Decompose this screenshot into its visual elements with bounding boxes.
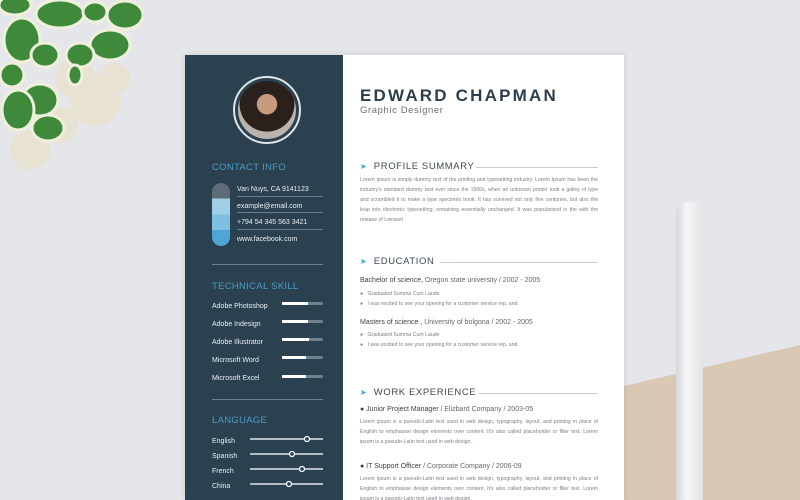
language: LANGUAGE bbox=[212, 415, 267, 426]
contact list: www.facebook.com bbox=[237, 236, 297, 242]
work experience: ● Junior Project Manager / Elizbard Company / 2003-05 bbox=[360, 406, 533, 413]
education bbox=[360, 256, 598, 348]
work experience bbox=[360, 387, 598, 500]
education: ● Graduated Summa Cum Laude bbox=[360, 291, 440, 297]
plant decoration bbox=[0, 0, 144, 170]
technical skill: TECHNICAL SKILL bbox=[212, 281, 299, 292]
contact icons pill bbox=[212, 183, 230, 246]
sidebar: French bbox=[212, 468, 234, 475]
education: ● Graduated Summa Cum Laude bbox=[360, 332, 440, 338]
subtitle: Graphic Designer bbox=[360, 105, 444, 116]
work experience: ● IT Support Officer / Corporate Company / 2006-09 bbox=[360, 463, 522, 470]
contact info heading: CONTACT INFO bbox=[212, 162, 286, 173]
sidebar: Microsoft Excel bbox=[212, 375, 259, 382]
education: ● I was excited to see your opening for a customer service rep, and. bbox=[360, 342, 519, 348]
contact list bbox=[237, 186, 323, 242]
sidebar: China bbox=[212, 483, 230, 490]
sidebar: English bbox=[212, 438, 235, 445]
skill bars bbox=[282, 302, 323, 378]
resume sheet bbox=[185, 55, 624, 500]
profile summary: Lorem Ipsum is simply dummy text of the printing and typesetting industry. Lorem Ipsum has been the industry's standard dummy text ever since the 1500s, when an unknown printer took a galley of type and scrambled it to make a type specimen book. It has survived not only five centuries, but also the leap into electronic typesetting, remaining essentially unchanged. It was popularised in the with the release of Letraset bbox=[360, 177, 598, 223]
sidebar bbox=[185, 55, 343, 500]
sidebar: Adobe Illustrator bbox=[212, 339, 263, 346]
education: ➤ EDUCATION bbox=[360, 256, 434, 267]
sidebar: Adobe Photoshop bbox=[212, 303, 268, 310]
education: Masters of science , University of bolgona / 2002 - 2005 bbox=[360, 319, 533, 326]
sidebar: Adobe Indesign bbox=[212, 321, 261, 328]
contact list: Van Nuys, CA 9141123 bbox=[237, 186, 309, 193]
language sliders bbox=[250, 436, 323, 488]
contact list: +794 54 345 563 3421 bbox=[237, 219, 307, 226]
sidebar: Microsoft Word bbox=[212, 357, 259, 364]
contact list: example@email.com bbox=[237, 202, 302, 210]
work experience: ➤ WORK EXPERIENCE bbox=[360, 387, 476, 398]
profile summary: ➤ PROFILE SUMMARY bbox=[360, 161, 474, 172]
name title: EDWARD CHAPMAN bbox=[360, 86, 558, 105]
photo bbox=[233, 76, 301, 144]
education: Bachelor of science, Oregon state university / 2002 - 2005 bbox=[360, 277, 540, 284]
decorative cylinder bbox=[676, 202, 703, 500]
sidebar: Spanish bbox=[212, 453, 237, 460]
work experience: Lorem ipsum is a pseudo-Latin text used in web design, typography, layout, and printing in place of English to emphasise design elements over content. It's also called placeholder or filler text. Lorem ipsum is a pseudo-Latin text used in web design. bbox=[360, 419, 598, 445]
education: ● I was excited to see your opening for a customer service rep, and. bbox=[360, 301, 519, 307]
